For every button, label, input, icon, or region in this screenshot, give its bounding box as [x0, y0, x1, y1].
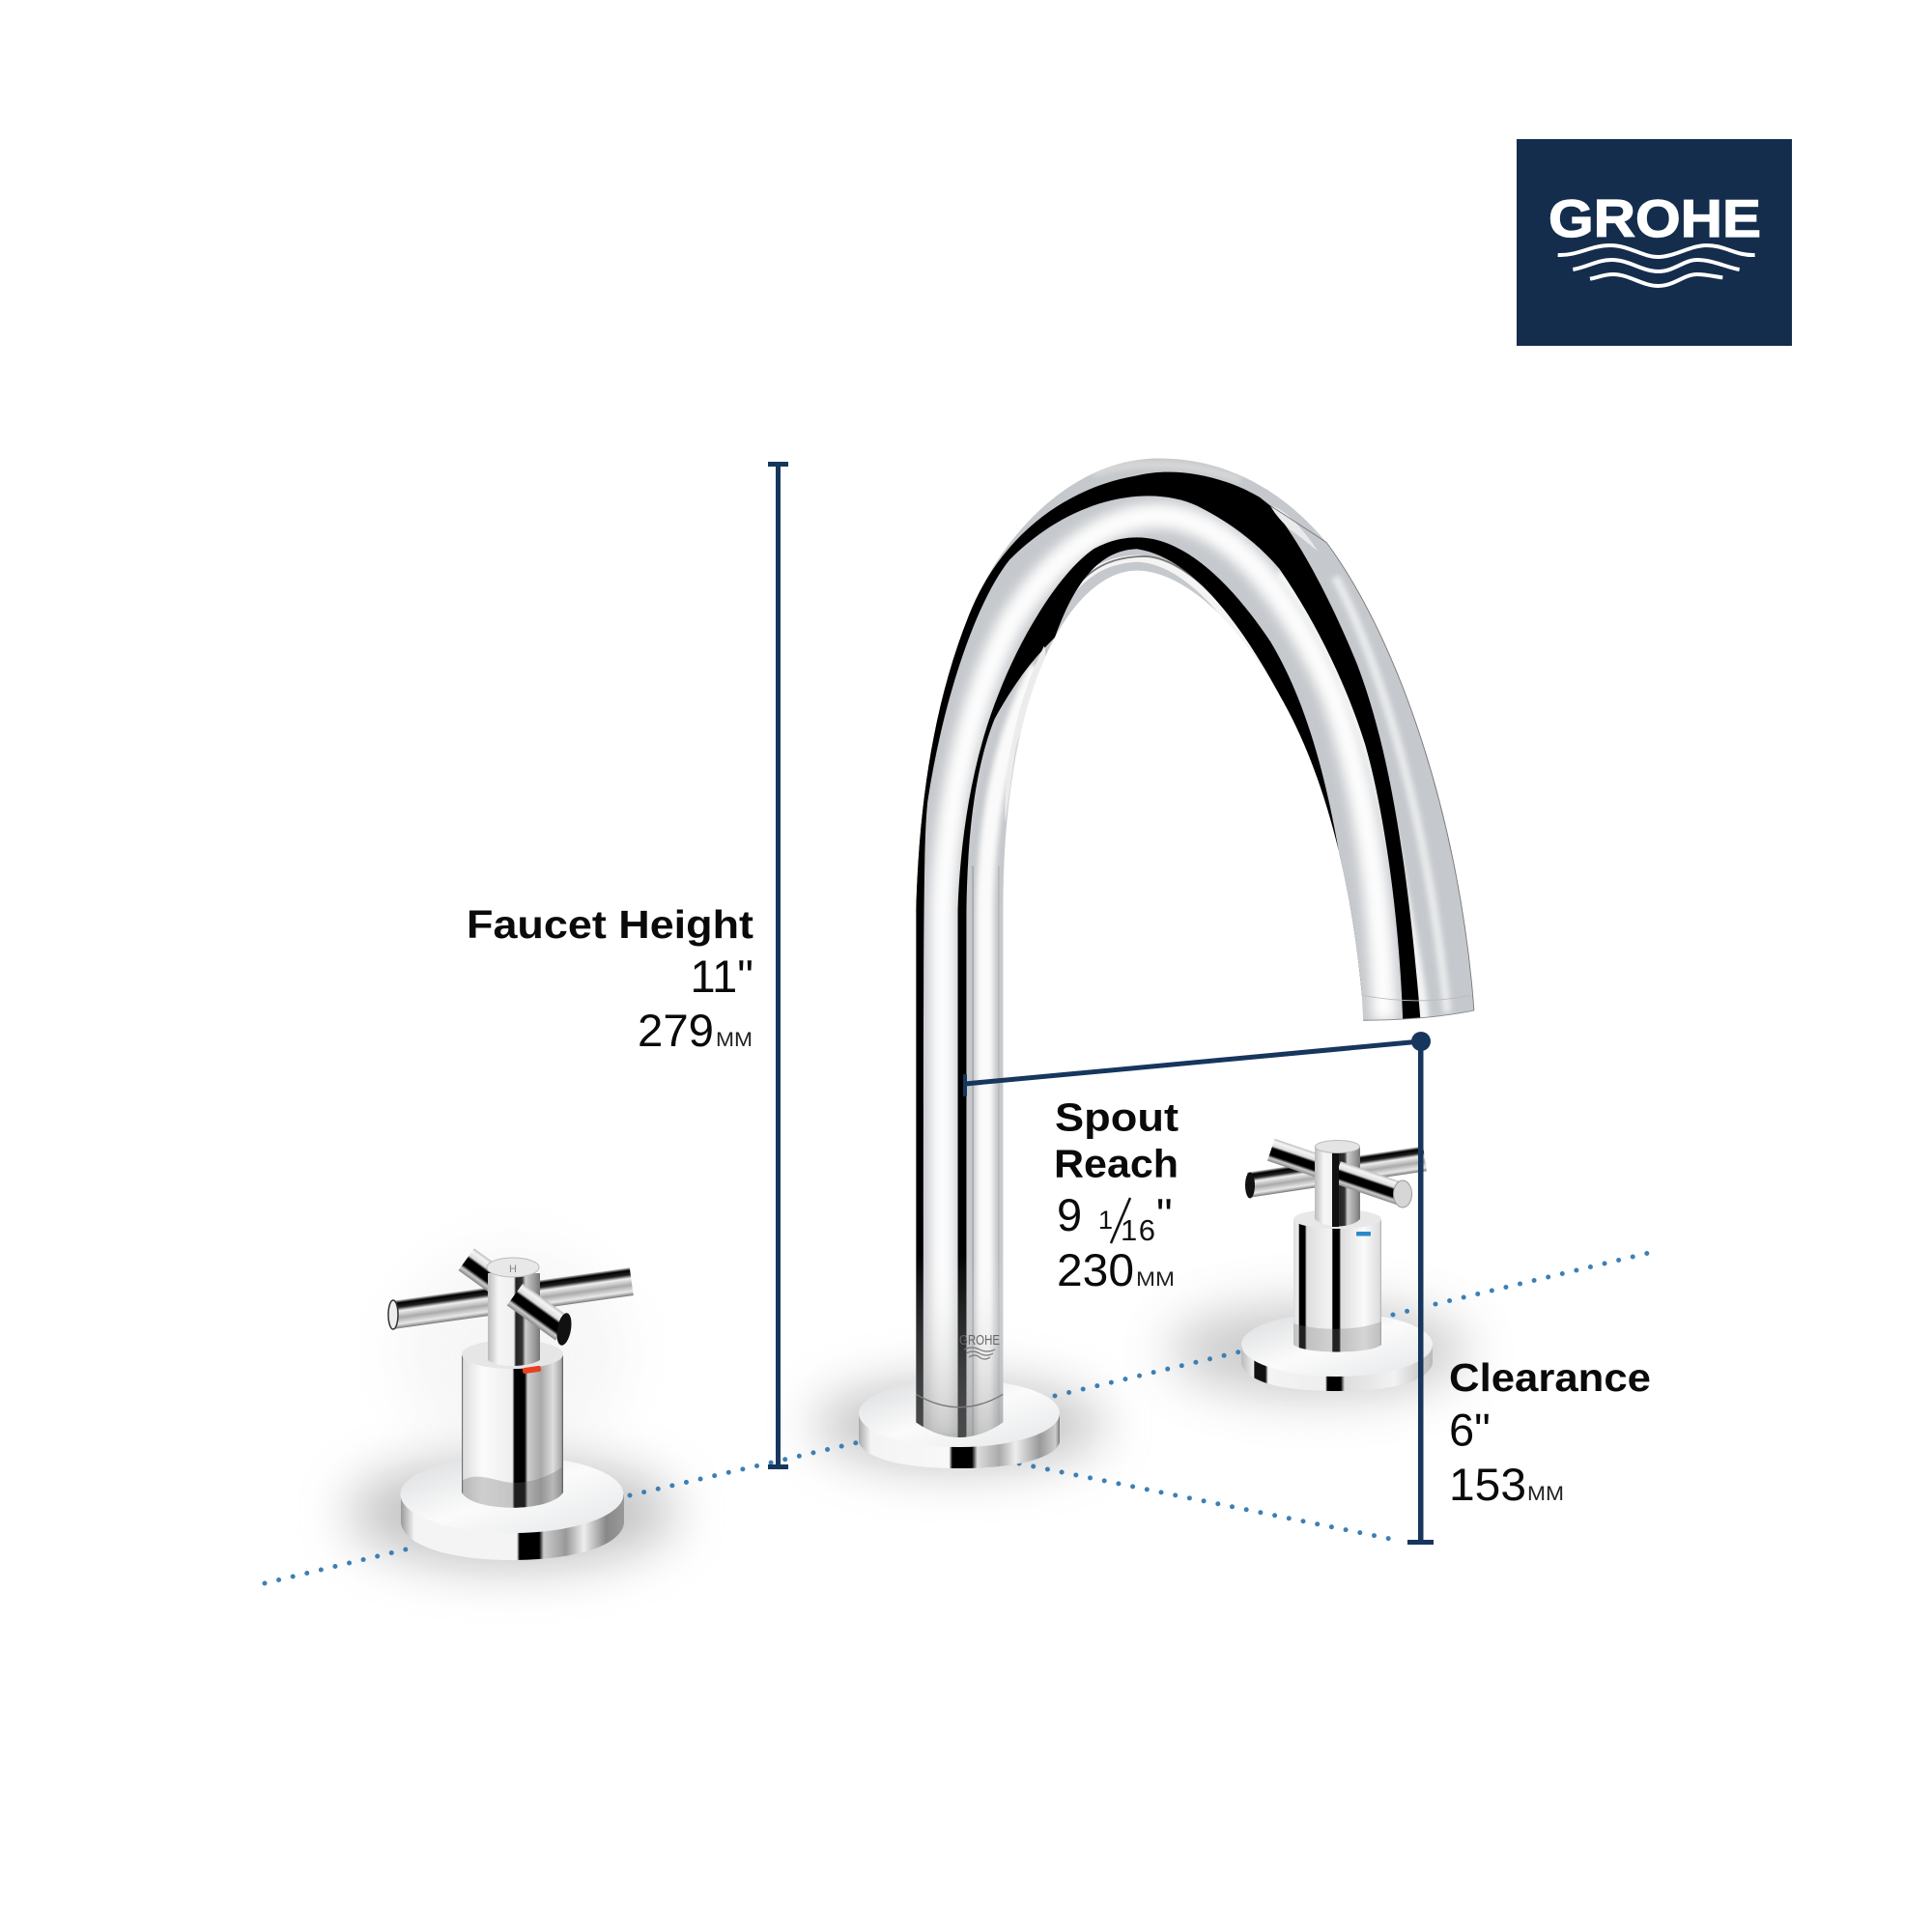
- label: spout reach: 9: [1057, 1189, 1082, 1240]
- inner dark reflection: [958, 537, 1362, 1437]
- dimension: clearance line: [1407, 1032, 1434, 1545]
- label: clearance: MM: [1527, 1483, 1564, 1505]
- inner rim highlights: [1076, 554, 1314, 769]
- right handle cross lever: [1245, 1139, 1427, 1227]
- left handle red indicator: [523, 1366, 541, 1374]
- label: spout reach: 1: [1098, 1206, 1113, 1235]
- dotted floor guide lines: [265, 1253, 1649, 1583]
- label: spout reach: MM: [1136, 1268, 1175, 1291]
- label: spout reach: ": [1156, 1189, 1173, 1240]
- outer dark reflection: [916, 472, 1421, 1437]
- right handle base disc: [1241, 1313, 1433, 1391]
- label: faucet height: 279: [638, 1005, 714, 1056]
- right handle (cold): [1241, 1139, 1433, 1391]
- left handle body: [462, 1340, 563, 1508]
- left handle (hot): [388, 1248, 634, 1560]
- label: faucet height: Faucet Height: [467, 902, 753, 947]
- label: spout reach: [1054, 1095, 1179, 1295]
- left handle base disc: [400, 1456, 624, 1560]
- label: clearance: Clearance: [1449, 1355, 1651, 1400]
- label: spout reach: Spout: [1055, 1095, 1179, 1140]
- faucet spout base disc: [859, 1379, 1060, 1468]
- label: clearance: 153: [1449, 1459, 1526, 1510]
- label: faucet height: 11": [691, 951, 753, 1002]
- GROHE engraving on stem: GROHE: [959, 1332, 1000, 1349]
- faucet spout: [916, 459, 1474, 1453]
- label: spout reach: Reach: [1054, 1142, 1179, 1186]
- dimension: spout reach line: [965, 1041, 1421, 1096]
- right handle blue indicator: [1356, 1232, 1371, 1236]
- label: clearance: 6": [1449, 1405, 1491, 1455]
- label: faucet height: MM: [716, 1029, 753, 1051]
- dimension: faucet height line: [768, 462, 788, 1469]
- label: clearance: [1449, 1355, 1651, 1510]
- infographic canvas: [263, 139, 1792, 1595]
- label: faucet height: [467, 902, 753, 1056]
- label: spout reach: 230: [1057, 1244, 1134, 1295]
- left handle cross lever: H: [509, 1264, 517, 1275]
- left handle cross lever: [388, 1248, 634, 1366]
- logo waves: [1558, 245, 1755, 286]
- right handle body: [1293, 1209, 1381, 1352]
- GROHE logo: [1517, 139, 1792, 346]
- label: spout reach: 16: [1121, 1213, 1155, 1247]
- GROHE logo: GROHE: [1548, 188, 1761, 248]
- GROHE engraving on stem: [959, 1332, 1000, 1359]
- floor shadows: [348, 1246, 1468, 1569]
